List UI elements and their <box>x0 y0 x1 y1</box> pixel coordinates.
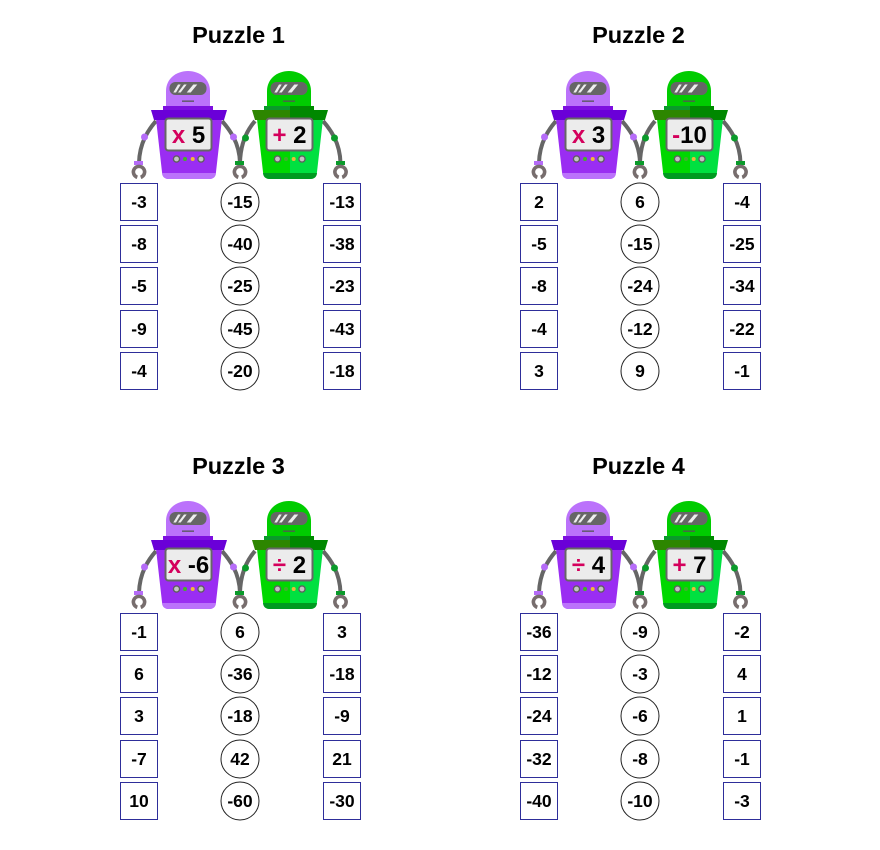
output boxes: -2 <box>734 622 750 642</box>
input boxes: -4 <box>531 319 547 339</box>
icon: purple robot, times 3 <box>533 71 646 179</box>
output boxes: -9 <box>334 706 350 726</box>
output boxes: -13 <box>329 192 355 212</box>
input boxes <box>120 184 158 390</box>
middle circles: -25 <box>227 276 253 296</box>
output boxes: -4 <box>734 192 750 212</box>
icon: purple robot, times 3: x 3 <box>572 122 605 149</box>
panel: puzzle 1 <box>120 22 360 390</box>
icon: green robot, plus 7 <box>635 501 746 609</box>
title: Puzzle 4: Puzzle 4 <box>592 453 685 479</box>
icon: purple robot, times 5 <box>133 71 246 179</box>
output boxes: -18 <box>329 664 355 684</box>
middle circles: -20 <box>227 361 253 381</box>
input boxes: -3 <box>131 192 147 212</box>
output boxes: -1 <box>734 749 750 769</box>
input boxes: -8 <box>531 276 547 296</box>
input boxes: -12 <box>526 664 552 684</box>
middle circles: -10 <box>627 791 653 811</box>
icon: green robot, minus 10: -10 <box>672 122 707 149</box>
input boxes: -4 <box>131 361 147 381</box>
middle circles: 9 <box>635 361 645 381</box>
output boxes <box>324 184 360 390</box>
output boxes: 21 <box>332 749 352 769</box>
output boxes: -22 <box>729 319 755 339</box>
middle circles: -40 <box>227 234 253 254</box>
middle circles: -15 <box>227 192 253 212</box>
input boxes: -9 <box>131 319 147 339</box>
middle circles: 6 <box>635 192 645 212</box>
middle circles <box>621 183 659 390</box>
middle circles: -12 <box>627 319 653 339</box>
output boxes: -34 <box>729 276 755 296</box>
input boxes: 6 <box>134 664 144 684</box>
output boxes: -25 <box>729 234 755 254</box>
icon: green robot, plus 2 <box>235 71 346 179</box>
middle circles <box>221 183 259 390</box>
icon: purple robot, divide by 4 <box>533 501 646 609</box>
middle circles: -18 <box>227 706 253 726</box>
middle circles: 6 <box>235 622 245 642</box>
input boxes: -1 <box>131 622 147 642</box>
input boxes <box>520 184 558 390</box>
input boxes: -32 <box>526 749 552 769</box>
panel: puzzle 4 <box>520 453 760 820</box>
middle circles: -6 <box>632 706 648 726</box>
middle circles: -9 <box>632 622 648 642</box>
middle circles: -3 <box>632 664 648 684</box>
panel: puzzle 3 <box>120 453 360 820</box>
input boxes: 3 <box>534 361 544 381</box>
middle circles: 42 <box>230 749 250 769</box>
input boxes: -5 <box>531 234 547 254</box>
output boxes: -43 <box>329 319 355 339</box>
output boxes: 3 <box>337 622 347 642</box>
middle circles: -24 <box>627 276 653 296</box>
icon: purple robot, times -6: x -6 <box>168 552 209 579</box>
icon: green robot, minus 10 <box>635 71 746 179</box>
input boxes: -36 <box>526 622 552 642</box>
input boxes: -40 <box>526 791 552 811</box>
icon: green robot, divide by 2 <box>235 501 346 609</box>
input boxes: 2 <box>534 192 544 212</box>
output boxes: -30 <box>329 791 355 811</box>
output boxes <box>324 614 360 820</box>
input boxes: -8 <box>131 234 147 254</box>
output boxes: -3 <box>734 791 750 811</box>
icon: green robot, plus 7: + 7 <box>672 552 707 579</box>
panel: puzzle 2 <box>520 22 760 390</box>
middle circles: -8 <box>632 749 648 769</box>
middle circles: -60 <box>227 791 253 811</box>
input boxes: -7 <box>131 749 147 769</box>
output boxes: -18 <box>329 361 355 381</box>
output boxes: -23 <box>329 276 355 296</box>
middle circles: -45 <box>227 319 253 339</box>
title: Puzzle 2: Puzzle 2 <box>592 22 685 48</box>
icon: green robot, divide by 2: ÷ 2 <box>273 552 306 579</box>
icon: green robot, plus 2: + 2 <box>272 122 307 149</box>
output boxes <box>724 614 760 820</box>
middle circles <box>221 613 259 820</box>
output boxes: -38 <box>329 234 355 254</box>
icon: purple robot, times 5: x 5 <box>172 122 205 149</box>
input boxes: -24 <box>526 706 552 726</box>
icon: purple robot, divide by 4: ÷ 4 <box>572 552 606 579</box>
input boxes: 10 <box>129 791 149 811</box>
output boxes <box>724 184 760 390</box>
input boxes: 3 <box>134 706 144 726</box>
middle circles: -15 <box>627 234 653 254</box>
middle circles: -36 <box>227 664 253 684</box>
output boxes: 1 <box>737 706 747 726</box>
title: Puzzle 3: Puzzle 3 <box>192 453 285 479</box>
icon: purple robot, times -6 <box>133 501 246 609</box>
input boxes: -5 <box>131 276 147 296</box>
input boxes <box>120 614 158 820</box>
middle circles <box>621 613 659 820</box>
title: Puzzle 1: Puzzle 1 <box>192 22 285 48</box>
output boxes: -1 <box>734 361 750 381</box>
output boxes: 4 <box>737 664 747 684</box>
input boxes <box>520 614 558 820</box>
